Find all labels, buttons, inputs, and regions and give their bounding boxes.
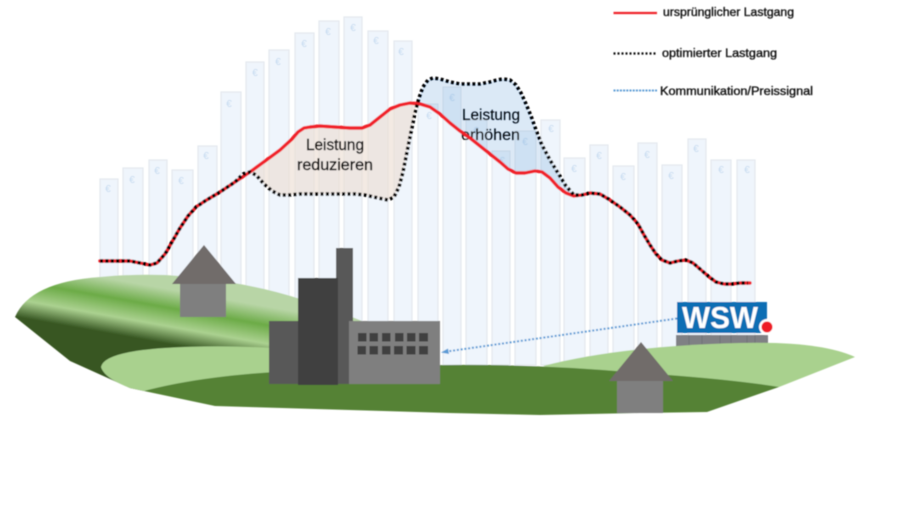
- price bars with euro signs: €: [596, 151, 602, 162]
- house left: [172, 245, 236, 317]
- price bars with euro signs: €: [473, 126, 479, 137]
- price bars with euro signs: €: [226, 99, 232, 110]
- factory: [269, 248, 440, 385]
- price bars with euro signs: €: [129, 175, 135, 186]
- left gradient hill: [15, 275, 400, 391]
- price bars with euro signs: €: [499, 156, 505, 167]
- price bars with euro signs: €: [620, 172, 626, 183]
- price bars with euro signs: €: [398, 47, 404, 58]
- scene: [15, 7, 855, 415]
- text: Leistung erhöhen: Leistung: [462, 107, 520, 124]
- price bars with euro signs: €: [522, 137, 528, 148]
- price bars with euro signs: €: [426, 111, 432, 122]
- price bars with euro signs: €: [203, 151, 209, 162]
- house right: [609, 342, 673, 413]
- price bars with euro signs: €: [744, 165, 750, 176]
- legend: red line: [614, 12, 657, 14]
- price bars with euro signs: €: [373, 36, 379, 47]
- price bars with euro signs: €: [449, 93, 455, 104]
- price bars with euro signs: €: [350, 23, 356, 34]
- price bars with euro signs: €: [548, 124, 554, 135]
- factory: chimney: [336, 248, 353, 384]
- price bars with euro signs: €: [252, 68, 258, 79]
- text: Leistung reduzieren: Leistung: [306, 137, 364, 154]
- factory: left block: [269, 321, 298, 384]
- legend: optimierter Lastgang: optimierter Lastgang: [662, 48, 777, 60]
- price bars with euro signs: €: [325, 27, 331, 38]
- price bars with euro signs: €: [301, 39, 307, 50]
- legend: [614, 7, 813, 98]
- price bars with euro signs: €: [275, 57, 281, 68]
- area: Leistung reduzieren: [250, 103, 416, 200]
- front dark green ground: [144, 365, 779, 415]
- price bars with euro signs: €: [178, 176, 184, 187]
- text: Leistung reduzieren: reduzieren: [297, 157, 373, 174]
- legend: Kommunikation/Preissignal: Kommunikation/Preissignal: [660, 86, 813, 98]
- factory: tower: [298, 278, 338, 385]
- black dotted optimized load curve: [100, 78, 748, 284]
- area: Leistung erhöhen: [416, 78, 574, 195]
- price bars with euro signs: €: [644, 150, 650, 161]
- price bars with euro signs: €: [668, 171, 674, 182]
- price bars with euro signs: €: [718, 165, 724, 176]
- text: Leistung erhöhen: erhöhen: [461, 127, 520, 144]
- price bars with euro signs: €: [154, 166, 160, 177]
- right light hill: [543, 343, 855, 400]
- red original load curve: [100, 103, 750, 284]
- factory: windows: [358, 333, 428, 354]
- legend: blue dotted line: [614, 90, 657, 92]
- WSW logo: WSW: [682, 300, 759, 335]
- price bars with euro signs: €: [571, 164, 577, 175]
- factory: hall: [349, 321, 440, 384]
- WSW sign base: [676, 335, 768, 349]
- price bars with euro signs: €: [693, 144, 699, 155]
- price bars with euro signs: €: [105, 184, 111, 195]
- price bars with euro signs: [100, 17, 755, 365]
- communication arrow: [441, 318, 677, 354]
- left light hill: [101, 346, 340, 391]
- legend: black dotted line: [614, 52, 657, 55]
- legend: ursprünglicher Lastgang: ursprünglicher Lastgang: [663, 7, 794, 19]
